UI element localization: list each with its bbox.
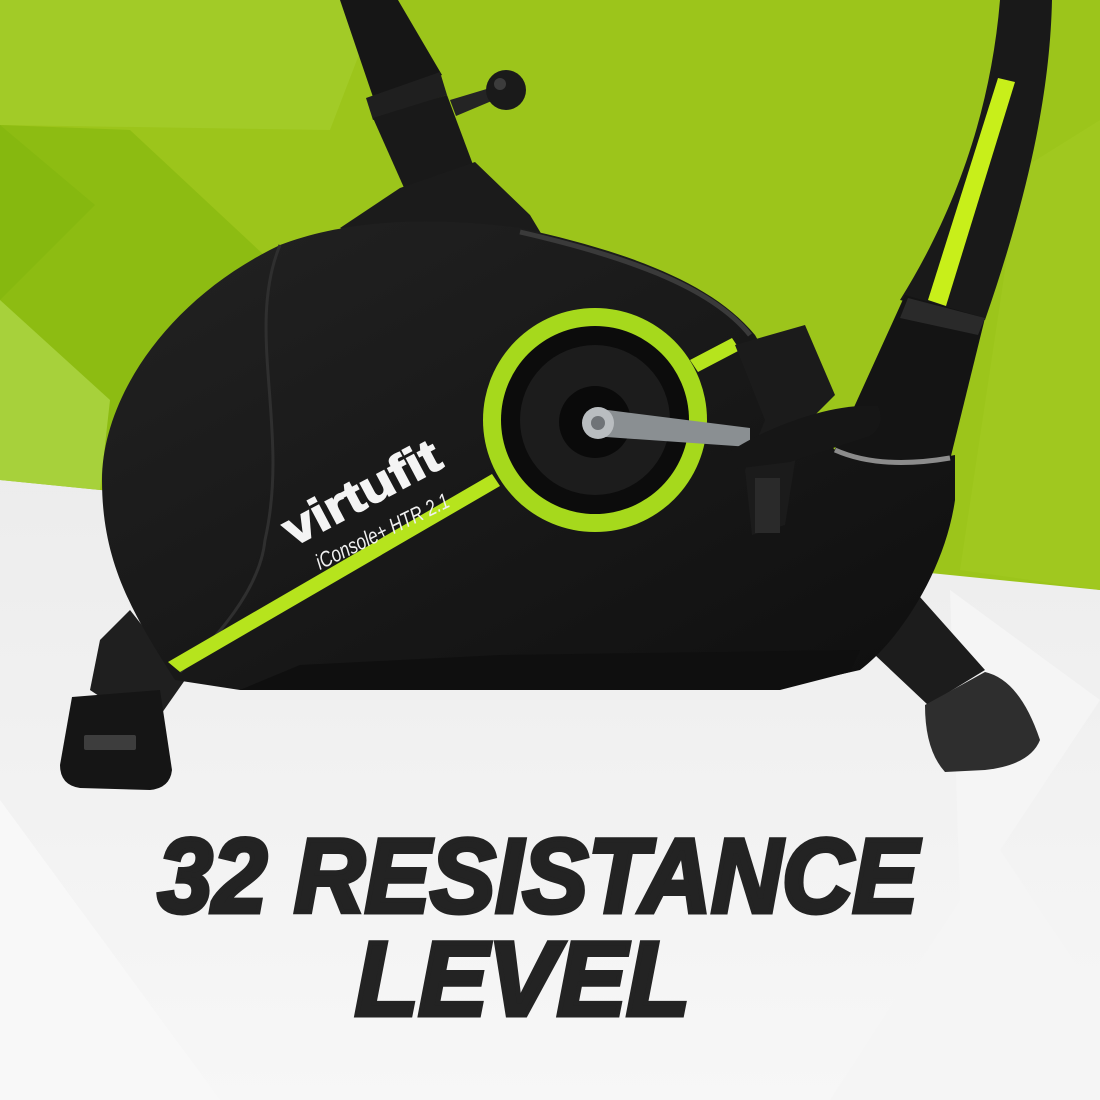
heading line 1: 32 RESISTANCE — [158, 818, 921, 935]
crank arm — [582, 407, 750, 447]
brand logo — [273, 428, 453, 574]
chrome arc near rear column — [835, 450, 950, 462]
logo: virtufit: virtufit — [273, 428, 450, 556]
heading — [158, 818, 921, 1038]
heading line 2: LEVEL — [355, 921, 690, 1038]
rear feet — [875, 597, 1040, 772]
front feet — [60, 610, 185, 790]
background: green faceted panel — [0, 0, 1100, 590]
rear handle column — [830, 0, 1052, 460]
green accent stripe lower — [168, 474, 500, 672]
housing shell seam — [180, 245, 280, 672]
background: light floor panel — [0, 450, 1100, 1100]
exercise bike — [60, 0, 1052, 790]
main flywheel housing — [102, 222, 955, 690]
green crank ring — [483, 308, 707, 532]
green accent stripe upper — [690, 338, 740, 372]
seat adjust knob — [450, 70, 526, 116]
logo: model name: iConsole+ HTR 2.1 — [311, 488, 453, 574]
upper rim highlight — [520, 232, 750, 335]
pedal and strap — [725, 325, 881, 535]
dark lower base — [240, 650, 860, 690]
seat post — [340, 0, 545, 250]
